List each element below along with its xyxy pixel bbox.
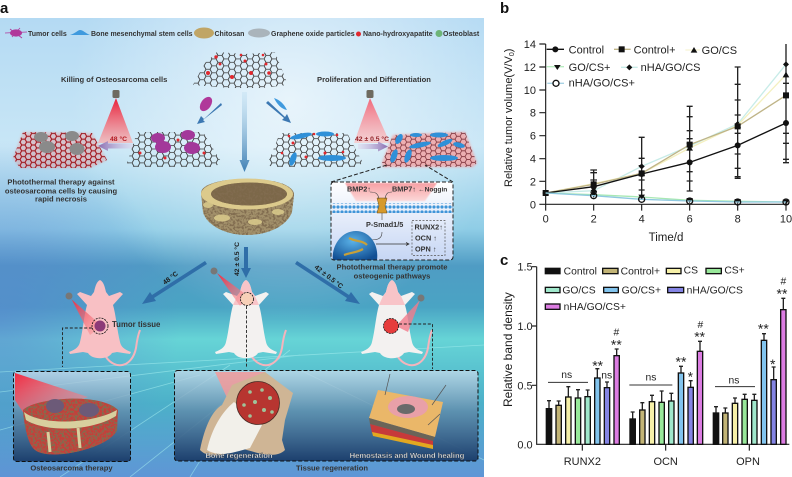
legend: Graphene oxide particles <box>271 31 355 38</box>
scaffold disk <box>201 178 294 235</box>
nucleus sphere <box>333 231 377 260</box>
arrow: 42 °C to differentiation <box>358 142 388 152</box>
axes: 6 <box>530 131 536 143</box>
significance annotations: ** <box>758 320 769 336</box>
pathway labels: BMP2↑ <box>347 184 371 194</box>
series: GO/CS <box>546 72 789 193</box>
skull bone with laser <box>200 372 293 456</box>
label: bone regeneration: Bone regeneration <box>205 451 273 460</box>
significance annotations: # <box>780 276 786 287</box>
legend c: CS <box>684 266 698 277</box>
caption: photothermal therapy against osteosarcoma: rapid necrosis <box>35 194 87 204</box>
legend c: Control+ <box>621 266 660 277</box>
bars: RUNX2 <box>546 356 619 444</box>
significance annotations: ** <box>694 329 706 345</box>
legend b: Control+ <box>634 44 675 56</box>
panel a: schematic <box>0 18 484 477</box>
axes: 6 <box>687 214 693 226</box>
arrow: to mouse 2: 42 ± 0.5 °C <box>233 242 241 276</box>
icon: stem cell with arrow <box>266 98 291 123</box>
caption: photothermal therapy promote <box>337 262 447 280</box>
chart b: relative tumor volume <box>503 39 792 244</box>
significance annotations: # <box>613 327 619 338</box>
laser: 42 °C: 42 ± 0.5 °C <box>355 135 389 143</box>
sheet: heated graphene with stem cells <box>382 132 477 167</box>
axes <box>524 39 792 226</box>
icon: tumor cell with arrow <box>197 95 222 124</box>
legend b <box>547 44 737 90</box>
series: nHA/GO/CS <box>546 61 789 194</box>
axes: 0 <box>543 214 549 226</box>
legend b: nHA/GO/CS+ <box>569 78 635 90</box>
arrow: nucleus to genes <box>376 242 409 246</box>
mouse 3: wound site <box>361 280 432 369</box>
icon: nano-hydroxyapatite <box>356 32 361 36</box>
icon: tumor cell <box>5 28 27 38</box>
inset: osteogenic pathway <box>331 165 453 260</box>
legend c: GO/CS+ <box>622 285 661 296</box>
significance annotations: ns <box>561 370 572 381</box>
caption: photothermal therapy against osteosarcoma: Photothermal therapy against <box>7 178 115 186</box>
axes: 2 <box>530 176 536 188</box>
y axis title: Relative tumor volume(V/V <box>503 56 515 187</box>
significance annotations: ** <box>777 285 788 301</box>
significance annotations: ns <box>646 373 656 384</box>
y axis title: 0 <box>509 52 516 56</box>
axes: 0.5 <box>517 380 533 392</box>
legend c: nHA/GO/CS+ <box>564 302 626 313</box>
caption: photothermal therapy against osteosarcoma: osteosarcoma cells by causing <box>5 186 117 196</box>
gene box: OPN ↑ <box>415 244 436 254</box>
caption: photothermal therapy against osteosarcoma <box>5 178 117 204</box>
top graphene sheet <box>193 52 288 88</box>
laser: 48 °C: 48 °C <box>110 135 127 143</box>
axes: 10 <box>524 85 536 97</box>
icon: graphene oxide particle <box>248 28 270 38</box>
connector <box>246 306 248 368</box>
legend c: GO/CS <box>562 285 596 296</box>
axes: 8 <box>530 108 536 120</box>
icon: chitosan <box>194 28 214 38</box>
box: osteosarcoma therapy <box>14 372 130 472</box>
legend: Chitosan <box>214 31 244 38</box>
laser <box>66 292 102 335</box>
tumor <box>92 318 108 334</box>
series: Control <box>543 120 789 196</box>
receptor <box>377 198 387 213</box>
legend b: GO/CS <box>702 45 737 57</box>
caption: photothermal therapy promote: osteogenic pathways <box>354 272 430 280</box>
inset: osteogenic pathway: ←Noggin <box>418 186 447 194</box>
legend c: Control <box>564 266 597 277</box>
series: Control+ <box>543 92 789 196</box>
axes: 1.5 <box>517 262 533 274</box>
laser: 42 °C <box>354 90 390 143</box>
sheet: graphene with tumor cells <box>127 130 222 167</box>
series: GO/CS+ <box>546 192 789 205</box>
mouse 1: tumor tissue <box>62 280 161 367</box>
panel label b: b <box>500 0 509 17</box>
laser: 48 °C <box>98 90 133 143</box>
significance annotations: ** <box>611 336 622 352</box>
significance annotations: ** <box>592 358 604 374</box>
sheet: graphene with stem cells <box>267 131 363 167</box>
series: nHA/GO/CS+ <box>546 193 789 205</box>
inset: osteogenic pathway: P-Smad1/5 <box>366 220 403 229</box>
significance annotations: * <box>688 369 694 385</box>
label: tumor tissue: Tumor tissue <box>112 320 161 329</box>
panel background <box>0 18 484 477</box>
significance annotations: # <box>697 320 703 331</box>
cell membrane <box>331 203 453 213</box>
arrow: to mouse 3: 42 ± 0.5 °C <box>313 263 345 291</box>
arrow: centre down to scaffold <box>240 92 250 172</box>
icon: stem cell <box>70 30 90 35</box>
scaffold with tumor <box>23 399 118 454</box>
axes: 14 <box>524 39 536 51</box>
significance annotations: ns <box>601 371 612 382</box>
axes: OPN <box>736 456 760 468</box>
label: hemostasis and wound healing: Hemostasis and Wound healing <box>350 451 465 460</box>
axes: OCN <box>653 456 678 468</box>
y axis title: Relative band density <box>501 292 515 407</box>
axes: 1.0 <box>517 321 533 333</box>
gene box: RUNX2↑ <box>414 222 443 232</box>
inset: osteogenic pathway: BMP7↑ <box>392 184 416 194</box>
legend c: nHA/GO/CS <box>687 285 743 296</box>
arrow: to mouse 1: 48 °C <box>161 270 180 287</box>
heading: proliferation and differentiation: Proliferation and Differentiation <box>317 75 431 84</box>
legend c: CS+ <box>724 266 745 277</box>
laser <box>396 294 424 332</box>
mouse 2: bone site <box>210 268 286 368</box>
gene box <box>412 220 445 256</box>
error bars <box>590 44 789 200</box>
error bars <box>547 298 785 419</box>
significance annotations <box>548 276 788 387</box>
significance annotations: ns <box>729 375 739 386</box>
gene box: OCN ↑ <box>415 234 437 242</box>
connector <box>399 324 432 369</box>
heading: killing of osteosarcoma cells: Killing of Osteosarcoma cells <box>61 75 167 84</box>
axes: 8 <box>735 214 741 226</box>
significance annotations: * <box>770 356 776 372</box>
arrow: to mouse 2 <box>233 242 251 278</box>
laser <box>210 268 248 306</box>
arrow: to mouse 1 <box>142 261 207 304</box>
legend b: Control <box>569 44 604 56</box>
icon: osteoblast <box>436 30 442 37</box>
legend b: nHA/GO/CS <box>641 62 700 74</box>
axes: 12 <box>524 62 536 74</box>
legend: Nano-hydroxyapatite <box>363 31 433 38</box>
caption: tissue regeneration: Tissue regeneration <box>296 464 368 472</box>
legend b: GO/CS+ <box>569 62 610 74</box>
arrow: 48 °C to necrosis <box>98 141 133 151</box>
axes: RUNX2 <box>564 456 601 468</box>
axes: 4 <box>530 154 536 166</box>
panel label a: a <box>0 0 9 17</box>
y axis title: ) <box>503 49 515 52</box>
legend c <box>545 266 745 313</box>
laser <box>15 373 88 420</box>
chart c: relative band density <box>501 262 789 468</box>
legend: Bone mesenchymal stem cells <box>91 31 193 38</box>
arrow: to mouse 3 <box>295 261 360 304</box>
box: tissue regeneration <box>174 370 478 472</box>
x axis title: Time/d <box>649 232 683 244</box>
bars: OPN <box>713 310 786 444</box>
heat zone <box>345 183 437 201</box>
connector lines <box>331 165 453 182</box>
axes: 2 <box>591 214 597 226</box>
significance annotations: ** <box>676 354 687 370</box>
axes: 0.0 <box>517 439 533 451</box>
axes: 0 <box>530 199 536 211</box>
caption: osteosarcoma therapy: Osteosarcoma therapy <box>30 464 113 472</box>
legend: Tumor cells <box>28 31 67 38</box>
axes: 10 <box>780 214 792 226</box>
legend <box>5 28 480 38</box>
caption: photothermal therapy promote: Photothermal therapy promote <box>337 262 447 272</box>
sheet: necrotic heated graphene <box>13 131 107 168</box>
bars: OCN <box>630 351 703 444</box>
connector <box>62 328 92 367</box>
axes <box>517 262 789 468</box>
wound skin block <box>369 374 446 449</box>
panel label c: c <box>500 252 508 269</box>
legend: Osteoblast <box>443 31 480 38</box>
axes: 4 <box>639 214 645 226</box>
